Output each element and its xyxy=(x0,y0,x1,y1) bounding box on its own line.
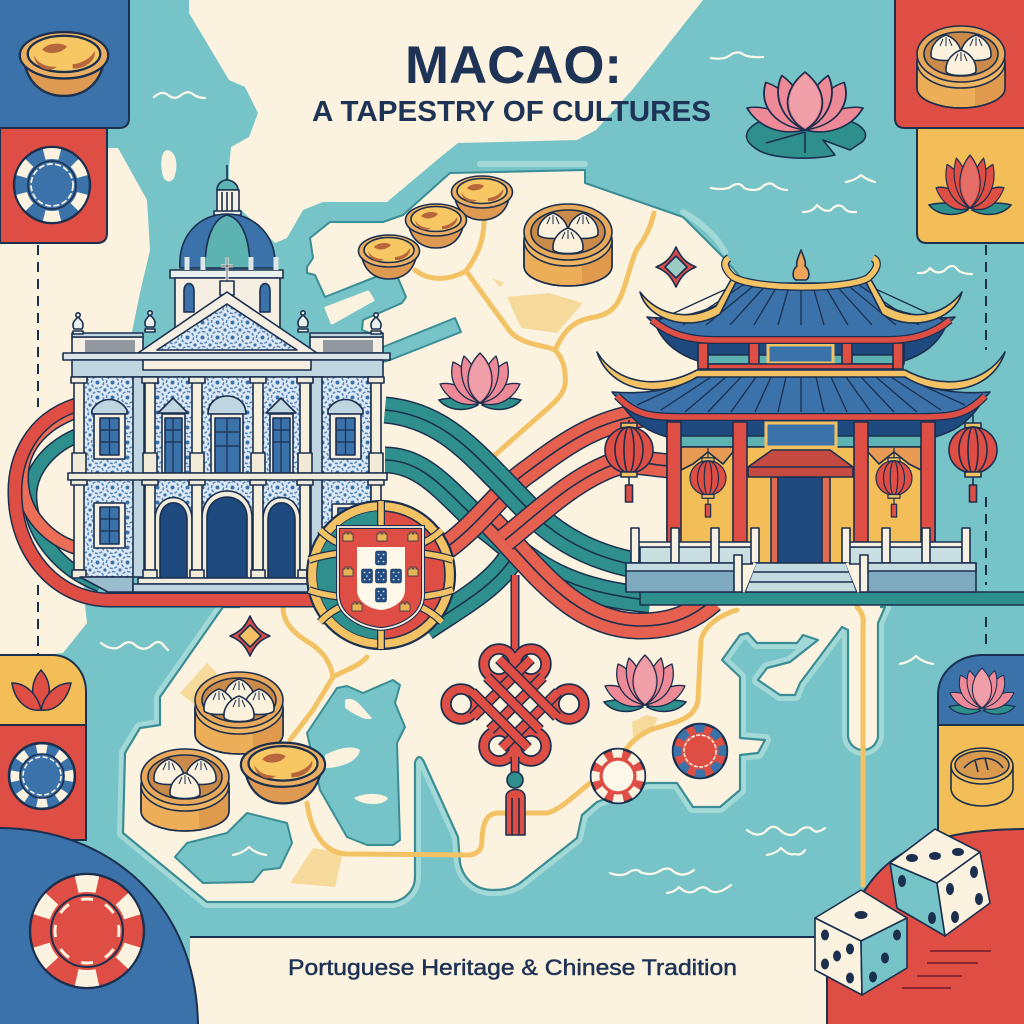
casino chip: blue and red xyxy=(673,724,727,778)
lower storey walls xyxy=(620,402,982,563)
upper storey xyxy=(657,328,945,369)
charm: south west diamond xyxy=(230,616,270,656)
shield xyxy=(338,527,423,629)
ribbon: upper teal xyxy=(385,410,640,566)
dumpling baskets: south west xyxy=(141,672,283,831)
shore highlights: north coast xyxy=(480,164,725,252)
lily pad lotus: top right water xyxy=(747,72,866,158)
icon: dumpling basket xyxy=(917,26,1005,108)
panel: red basket tile xyxy=(895,0,1024,128)
ribbon: medallion teal xyxy=(425,560,510,628)
custard tarts trio xyxy=(358,176,512,279)
land: central island xyxy=(223,170,885,607)
panel: top right corner xyxy=(895,0,1024,243)
icon: red chip xyxy=(30,874,144,988)
sand patches xyxy=(180,278,658,887)
icon: pink lotus xyxy=(949,668,1015,714)
panel: red chip tile xyxy=(0,725,86,840)
lake islets xyxy=(325,699,388,804)
dumpling basket: top xyxy=(524,204,612,286)
ribbon: lower red arc xyxy=(488,520,712,626)
icon: red lotus xyxy=(929,155,1011,214)
lanterns xyxy=(605,415,997,517)
bottom caption strip: Portuguese Heritage & Chinese Tradition xyxy=(288,955,737,980)
lantern: small right xyxy=(876,448,912,517)
custard tart: south west xyxy=(241,743,325,803)
columns upper xyxy=(71,377,384,473)
balustrades xyxy=(72,311,383,353)
icon: basket outline xyxy=(951,748,1013,806)
lantern: big left xyxy=(605,420,653,502)
land: title headland xyxy=(189,0,703,243)
panel: yellow basket tile xyxy=(938,725,1024,840)
icon: blue chip xyxy=(14,147,90,223)
pediment with azulejo tiles xyxy=(138,292,317,353)
inland lake: south west xyxy=(175,813,292,883)
ribbon: orange loop xyxy=(22,412,76,548)
arched doors xyxy=(94,491,363,578)
map: land masses xyxy=(0,0,885,902)
cornice and entablature xyxy=(63,353,390,377)
upper roof xyxy=(640,258,962,340)
lower roof xyxy=(597,352,1005,418)
Portuguese baroque building xyxy=(63,165,390,592)
icon: back die xyxy=(890,829,990,936)
title: A TAPESTRY OF CULTURES xyxy=(312,96,711,128)
dashed guide lines xyxy=(38,245,986,655)
panel: blue tart tile xyxy=(0,0,129,128)
icon: custard tart xyxy=(20,32,108,96)
icon: front die xyxy=(815,890,907,995)
panel: bottom right corner xyxy=(815,655,1024,1024)
land: western shore xyxy=(0,130,150,660)
tiled walls xyxy=(83,377,371,577)
river island xyxy=(161,150,176,181)
title xyxy=(312,36,711,128)
panel: red dice tile xyxy=(827,829,1024,1024)
panel: bottom left corner xyxy=(0,655,198,1024)
ribbon: upper red xyxy=(440,414,650,552)
ribbon: red loop xyxy=(15,405,320,600)
floor band xyxy=(68,473,387,480)
land: southern island xyxy=(123,607,885,902)
ribbons: left loop xyxy=(15,405,320,600)
lotus: south centre xyxy=(604,655,686,711)
upper windows xyxy=(92,396,363,473)
inland lake: central xyxy=(307,680,405,845)
bottom caption strip xyxy=(190,937,830,1024)
panel: blue lotus tile xyxy=(938,655,1024,725)
ribbon: middle red xyxy=(505,462,670,540)
roads xyxy=(283,213,863,885)
casino chip: red and white xyxy=(591,749,645,803)
columns lower xyxy=(71,480,384,578)
ribbon: temple base band xyxy=(640,592,1024,605)
water waves xyxy=(101,52,972,893)
ribbon: teal loop xyxy=(30,436,100,585)
ribbons: interwoven crossing xyxy=(385,410,1024,628)
chinese knot xyxy=(446,575,584,835)
title: MACAO: xyxy=(405,36,622,95)
motion lines xyxy=(902,951,991,988)
Chinese temple xyxy=(597,250,1005,592)
Portuguese coat of arms medallion xyxy=(307,501,455,649)
icon: red flower xyxy=(12,670,71,710)
temple base and balustrades xyxy=(626,528,976,592)
lantern: big right xyxy=(949,415,997,502)
panel: red chip tile xyxy=(0,125,107,243)
land: cover for lower channel xyxy=(240,560,880,610)
panel: yellow lotus tile xyxy=(0,655,86,725)
finial xyxy=(793,250,809,280)
base steps xyxy=(80,577,308,592)
dome xyxy=(170,165,283,328)
ribbon: lower teal xyxy=(385,460,650,600)
lantern: small left xyxy=(690,448,726,517)
charm: top diamond xyxy=(656,247,696,287)
panel: top left corner xyxy=(0,0,129,243)
icon: blue chip xyxy=(9,743,75,809)
panel: blue chip quarter circle xyxy=(0,828,198,1024)
lotus: centre xyxy=(439,353,521,409)
panel: yellow lotus tile xyxy=(917,125,1024,243)
harbour islet xyxy=(326,292,373,323)
